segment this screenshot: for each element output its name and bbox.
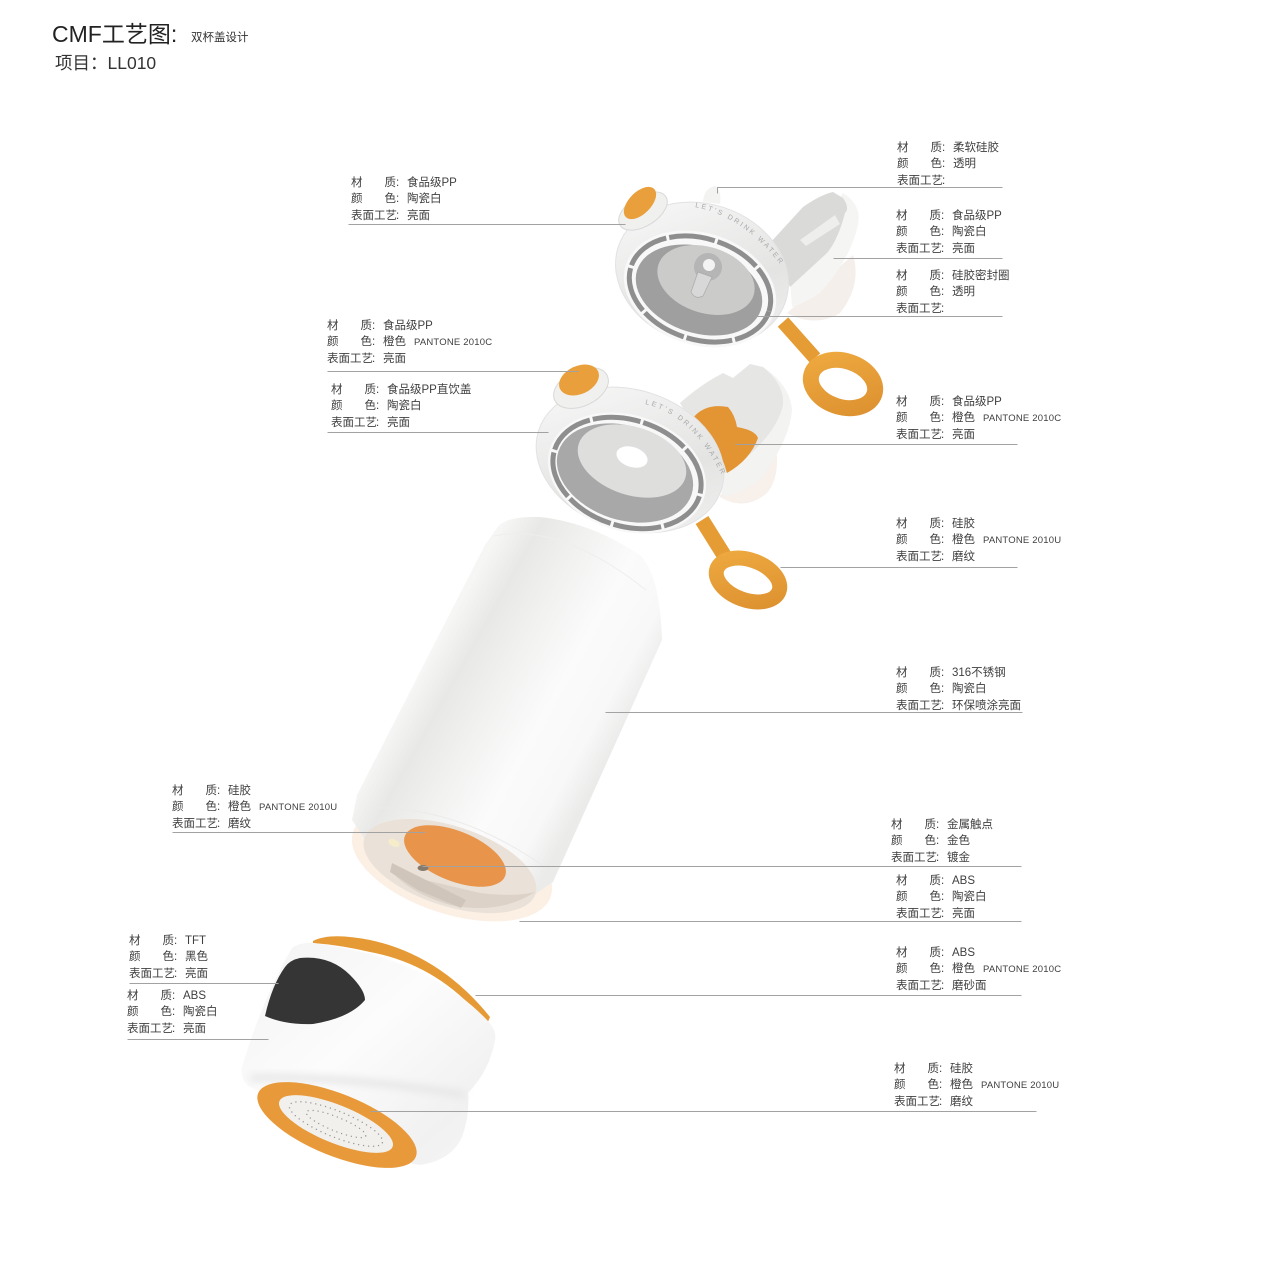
label: orange spout: 颜色 xyxy=(896,412,941,424)
label: TFT screen: 材质 xyxy=(129,935,174,947)
perforated speaker plate xyxy=(272,1084,400,1164)
label: bottle bottom ABS: 材质 xyxy=(896,875,941,887)
bottle shell xyxy=(352,517,662,894)
label: base bottom ring: 表面工艺 xyxy=(894,1096,940,1108)
label: soft silicone nub: 透明 xyxy=(953,158,976,170)
label: orange loop strap: 材质 xyxy=(896,518,941,530)
label: orange spout: 表面工艺 xyxy=(896,429,942,441)
flip lid shell xyxy=(715,367,792,497)
label: bottle body: 316不锈钢 xyxy=(952,667,1006,679)
label: orange spout: 材质 xyxy=(896,396,941,408)
label: upper push button: 颜色 xyxy=(351,193,396,205)
label: orange button: 颜色 xyxy=(327,336,372,348)
label: direct drinking lid: : xyxy=(376,417,379,429)
label: base bottom ring: 硅胶 xyxy=(950,1063,973,1075)
label: base bottom ring xyxy=(894,1062,1059,1108)
label: base top ring: 颜色 xyxy=(896,963,941,975)
label: bottle bottom ABS: 亮面 xyxy=(952,908,975,920)
metal contact point xyxy=(418,865,428,871)
label: base bottom ring: 颜色 xyxy=(894,1079,939,1091)
embossed rim text: LET'S DRINK WATER xyxy=(646,400,725,474)
orange silicone loop strap xyxy=(702,520,786,610)
label: base top ring xyxy=(896,946,1061,992)
label: bottle bottom ABS: : xyxy=(941,908,944,920)
cavity shadow xyxy=(392,872,535,908)
label: orange button: 食品级PP xyxy=(383,320,433,332)
project number: 项目：LL010 xyxy=(55,53,156,73)
label: upper lid shell: : xyxy=(941,226,944,238)
label: base body xyxy=(127,989,218,1035)
drinking hole xyxy=(614,443,650,471)
label: base bottom ring: 磨纹 xyxy=(950,1096,973,1108)
label: silicone seal ring: 颜色 xyxy=(896,286,941,298)
label: direct drinking lid: : xyxy=(376,400,379,412)
cap cavity xyxy=(624,229,774,351)
label: base top ring: 磨砂面 xyxy=(952,980,986,992)
bottle cavity xyxy=(352,800,548,932)
label: bottle bottom ABS: : xyxy=(941,875,944,887)
label: soft silicone nub: : xyxy=(942,142,945,154)
embossed rim text: LET'S DRINK WATER xyxy=(696,202,783,264)
label: orange loop strap xyxy=(896,517,1061,563)
cap slots and white rim xyxy=(609,212,791,366)
silicone seal dome xyxy=(720,455,777,504)
label: orange loop strap: 磨纹 xyxy=(952,551,975,563)
label: TFT screen xyxy=(129,934,208,980)
label: direct drinking lid: 食品级PP直饮盖 xyxy=(387,384,471,396)
translucent silicone seal dome xyxy=(787,255,856,320)
label: direct drinking lid: 表面工艺 xyxy=(331,417,377,429)
label: bottle body: : xyxy=(941,700,944,712)
label: bottle body: 材质 xyxy=(896,667,941,679)
label: base top ring: 材质 xyxy=(896,947,941,959)
label: direct drinking lid: 陶瓷白 xyxy=(387,400,422,412)
label: upper lid shell xyxy=(896,209,1002,255)
label: base body: ABS xyxy=(183,990,206,1002)
upper cap: straw drinking lid assembly xyxy=(615,186,884,416)
label: upper lid shell: : xyxy=(941,210,944,222)
label: orange spout xyxy=(896,395,1061,441)
label: bottle body: 颜色 xyxy=(896,683,941,695)
orange silicone bottom ring xyxy=(247,1064,427,1186)
label: metal contact xyxy=(891,818,993,864)
label: upper lid shell: 材质 xyxy=(896,210,941,222)
label: silicone seal ring: : xyxy=(941,286,944,298)
cap outer shell xyxy=(597,180,807,368)
label: base top ring: ABS xyxy=(952,947,975,959)
label: TFT screen: TFT xyxy=(185,935,206,947)
label: upper lid shell: 食品级PP xyxy=(952,210,1002,222)
label: soft silicone nub: 柔软硅胶 xyxy=(953,142,999,154)
label: upper push button: 亮面 xyxy=(407,210,430,222)
label: metal contact: : xyxy=(936,852,939,864)
orange contact plate xyxy=(396,813,514,899)
label: soft silicone nub: 材质 xyxy=(897,142,942,154)
label: direct drinking lid xyxy=(331,383,471,429)
label: orange button: : xyxy=(372,336,375,348)
label: bottle body: 陶瓷白 xyxy=(952,683,986,695)
label: orange button: 橙色 PANTONE 2010C xyxy=(383,336,492,348)
gold spot xyxy=(387,837,401,849)
label: upper push button: : xyxy=(396,210,399,222)
label: orange contact plate: 橙色 PANTONE 2010U xyxy=(228,801,337,813)
label: silicone seal ring: : xyxy=(941,270,944,282)
label: base bottom ring: 橙色 PANTONE 2010U xyxy=(950,1079,1059,1091)
label: TFT screen: : xyxy=(174,968,177,980)
label: upper push button: : xyxy=(396,193,399,205)
label: bottle body: 环保喷涂亮面 xyxy=(952,700,1021,712)
shoulder and step lines xyxy=(494,534,646,590)
label: base top ring: : xyxy=(941,963,944,975)
label: bottle bottom ABS xyxy=(896,874,986,920)
label: silicone seal ring xyxy=(896,269,1010,315)
label: orange button: : xyxy=(372,353,375,365)
label: upper push button: : xyxy=(396,177,399,189)
label: metal contact: 表面工艺 xyxy=(891,852,937,864)
cavity slot xyxy=(390,863,466,908)
label: base body: : xyxy=(172,1023,175,1035)
label: silicone seal ring: 表面工艺 xyxy=(896,303,942,315)
label: orange loop strap: 硅胶 xyxy=(952,518,975,530)
label: orange contact plate: 表面工艺 xyxy=(172,818,218,830)
label: orange button: 材质 xyxy=(327,320,372,332)
label: silicone seal ring: 透明 xyxy=(952,286,975,298)
title: CMF工艺图: xyxy=(52,21,177,47)
label: soft silicone nub xyxy=(897,141,999,187)
label: upper lid shell: 陶瓷白 xyxy=(952,226,986,238)
label: metal contact: : xyxy=(936,835,939,847)
label: orange loop strap: 橙色 PANTONE 2010U xyxy=(952,534,1061,546)
label: base body: 亮面 xyxy=(183,1023,206,1035)
label: orange contact plate xyxy=(172,784,337,830)
label: base body: : xyxy=(172,1006,175,1018)
stainless steel bottle body xyxy=(338,517,662,944)
label: upper push button: 表面工艺 xyxy=(351,210,397,222)
base lower shading xyxy=(250,1078,465,1095)
label: silicone seal ring: 材质 xyxy=(896,270,941,282)
label: base body: 颜色 xyxy=(127,1006,172,1018)
translucent silicone nub xyxy=(703,186,720,204)
label: soft silicone nub: 表面工艺 xyxy=(897,175,943,187)
label: metal contact: 材质 xyxy=(891,819,936,831)
label: TFT screen: 颜色 xyxy=(129,951,174,963)
label: bottle bottom ABS: 表面工艺 xyxy=(896,908,942,920)
label: orange contact plate: : xyxy=(217,801,220,813)
label: bottle body xyxy=(896,666,1021,712)
lower cap: direct drinking lid assembly xyxy=(536,364,792,610)
label: orange button: : xyxy=(372,320,375,332)
label: orange spout: 亮面 xyxy=(952,429,975,441)
bottle bottom rim xyxy=(338,784,566,944)
label: base body: 表面工艺 xyxy=(127,1023,173,1035)
label: orange loop strap: : xyxy=(941,534,944,546)
label: soft silicone nub: : xyxy=(942,158,945,170)
cap slots and white rim xyxy=(532,393,722,553)
label: TFT screen: 亮面 xyxy=(185,968,208,980)
base white body xyxy=(242,943,495,1165)
flip lid interior xyxy=(770,192,847,287)
label: base bottom ring: : xyxy=(939,1063,942,1075)
label: base bottom ring: : xyxy=(939,1079,942,1091)
label: bottle body: 表面工艺 xyxy=(896,700,942,712)
label: orange spout: : xyxy=(941,412,944,424)
base module xyxy=(242,936,495,1186)
orange top ring xyxy=(313,936,490,1024)
label: orange contact plate: 颜色 xyxy=(172,801,217,813)
straw valve xyxy=(691,253,722,297)
label: base top ring: : xyxy=(941,980,944,992)
label: silicone seal ring: 硅胶密封圈 xyxy=(952,270,1010,282)
label: orange contact plate: : xyxy=(217,818,220,830)
label: metal contact: 金属触点 xyxy=(947,819,993,831)
label: silicone seal ring: : xyxy=(941,303,944,315)
label: orange button xyxy=(327,319,492,365)
label: base top ring: : xyxy=(941,947,944,959)
label: orange loop strap: : xyxy=(941,518,944,530)
label: TFT screen: : xyxy=(174,935,177,947)
flip lid shell xyxy=(790,193,859,307)
label: upper push button: 食品级PP xyxy=(407,177,457,189)
label: base top ring: 橙色 PANTONE 2010C xyxy=(952,963,1061,975)
label: TFT screen: 表面工艺 xyxy=(129,968,175,980)
label: direct drinking lid: 材质 xyxy=(331,384,376,396)
label: base body: 陶瓷白 xyxy=(183,1006,218,1018)
label: upper push button xyxy=(351,176,457,222)
flip lid interior xyxy=(680,364,783,475)
subtitle: 双杯盖设计 xyxy=(191,32,248,44)
label: orange loop strap: 表面工艺 xyxy=(896,551,942,563)
label: bottle bottom ABS: 陶瓷白 xyxy=(952,891,986,903)
label: orange spout: 食品级PP xyxy=(952,396,1002,408)
label: orange loop strap: : xyxy=(941,551,944,563)
label: TFT screen: 黑色 xyxy=(185,951,208,963)
leader lines xyxy=(128,188,1036,1112)
label: direct drinking lid: 亮面 xyxy=(387,417,410,429)
label: upper lid shell: 颜色 xyxy=(896,226,941,238)
label: metal contact: 镀金 xyxy=(947,852,970,864)
label: bottle bottom ABS: : xyxy=(941,891,944,903)
label: bottle body: : xyxy=(941,683,944,695)
label: metal contact: 颜色 xyxy=(891,835,936,847)
label: orange button: 亮面 xyxy=(383,353,406,365)
orange inner spout xyxy=(693,406,758,473)
label: orange spout: : xyxy=(941,396,944,408)
label: orange spout: 橙色 PANTONE 2010C xyxy=(952,412,1061,424)
label: soft silicone nub: : xyxy=(942,175,945,187)
label: upper push button: 陶瓷白 xyxy=(407,193,442,205)
label: orange contact plate: : xyxy=(217,785,220,797)
label: bottle body: : xyxy=(941,667,944,679)
label: bottle bottom ABS: ABS xyxy=(952,875,975,887)
orange push button xyxy=(547,358,615,417)
label: upper lid shell: 亮面 xyxy=(952,243,975,255)
label: upper push button: 材质 xyxy=(351,177,396,189)
label: metal contact: : xyxy=(936,819,939,831)
label: soft silicone nub: 颜色 xyxy=(897,158,942,170)
orange silicone loop strap xyxy=(783,322,881,416)
orange push button xyxy=(612,181,674,238)
label: orange contact plate: 磨纹 xyxy=(228,818,251,830)
cap cavity xyxy=(544,407,706,539)
label: orange contact plate: 材质 xyxy=(172,785,217,797)
cap outer shell xyxy=(517,364,743,556)
label: orange button: 表面工艺 xyxy=(327,353,373,365)
label: metal contact: 金色 xyxy=(947,835,970,847)
label: base bottom ring: 材质 xyxy=(894,1063,939,1075)
label: direct drinking lid: : xyxy=(376,384,379,396)
label: base bottom ring: : xyxy=(939,1096,942,1108)
label: bottle bottom ABS: 颜色 xyxy=(896,891,941,903)
label: base top ring: 表面工艺 xyxy=(896,980,942,992)
label: direct drinking lid: 颜色 xyxy=(331,400,376,412)
label: orange contact plate: 硅胶 xyxy=(228,785,251,797)
label: upper lid shell: : xyxy=(941,243,944,255)
label: base body: 材质 xyxy=(127,990,172,1002)
label: base body: : xyxy=(172,990,175,1002)
label: orange spout: : xyxy=(941,429,944,441)
TFT screen xyxy=(265,958,365,1024)
label: orange loop strap: 颜色 xyxy=(896,534,941,546)
label: upper lid shell: 表面工艺 xyxy=(896,243,942,255)
label: TFT screen: : xyxy=(174,951,177,963)
